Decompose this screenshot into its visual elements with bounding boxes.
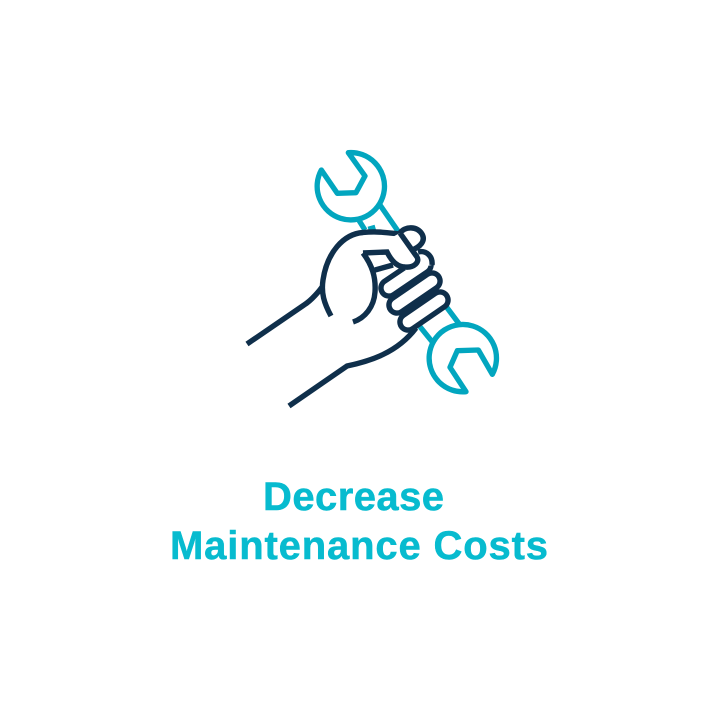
hand xyxy=(247,228,440,406)
icon: hand gripping wrench xyxy=(247,153,496,406)
fingertip and knuckle xyxy=(400,228,423,250)
title line 2: Maintenance Costs xyxy=(170,524,548,568)
fingers xyxy=(389,265,440,322)
lower arm xyxy=(289,328,416,406)
title xyxy=(170,475,548,568)
wrench xyxy=(317,153,496,392)
thumb xyxy=(363,233,418,267)
wrench lower head xyxy=(429,324,496,392)
wrench handle xyxy=(358,205,460,344)
finger bands inner xyxy=(389,265,440,322)
title line 1: Decrease xyxy=(263,475,444,519)
arm and fist outline xyxy=(247,232,400,344)
wrench upper head xyxy=(317,153,384,220)
finger bands outer xyxy=(389,265,440,322)
